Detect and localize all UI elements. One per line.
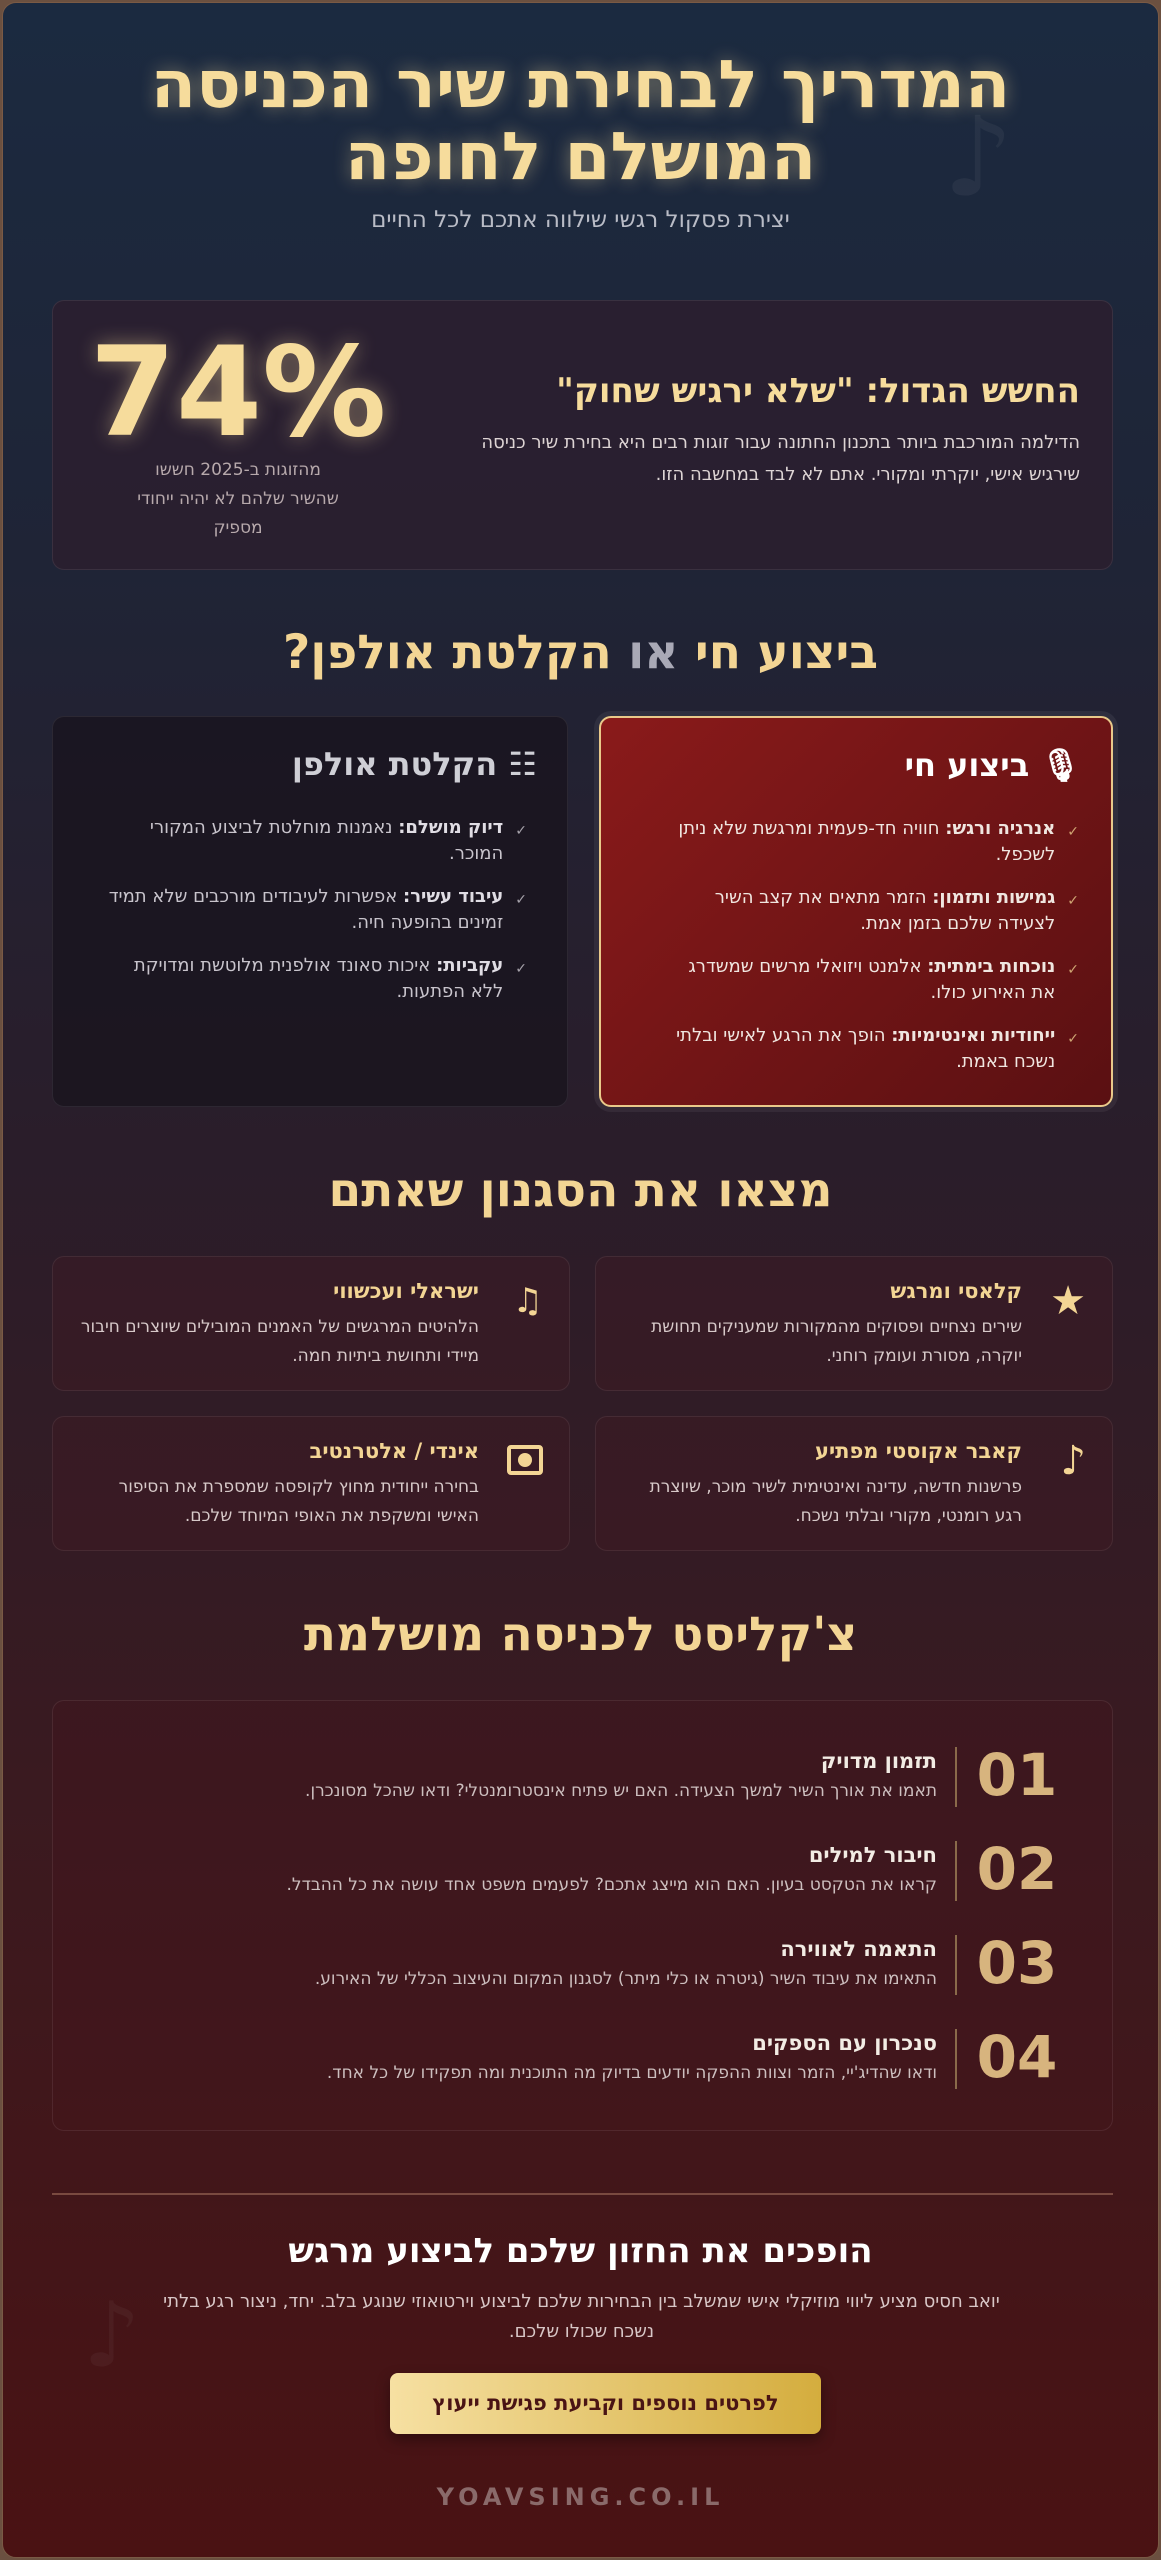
live list <box>676 818 1079 1072</box>
decorative note icon bottom: ♪ <box>83 2283 140 2388</box>
panel: checklist: 02 <box>977 1835 1057 1903</box>
panel: studio <box>52 716 568 1107</box>
title: המושלם לחופה <box>345 118 816 195</box>
live heading: 🎙 ביצוע חי <box>905 746 1081 784</box>
stat caption: מהזוגות ב-2025 חששו שהשיר שלהם לא יהיה ייחודי מספיק <box>137 460 339 538</box>
live list: אנרגיה ורגש: חוויה חד-פעמית ומרגשת שלא ניתן לשכפל. <box>678 818 1055 865</box>
card: acoustic: פרשנות חדשה, עדינה ואינטימית לשיר מוכר, שיוצרת רגע רומנטי, מקורי ובלתי נשכח. <box>650 1477 1022 1526</box>
title <box>148 46 1015 195</box>
studio list: עיבוד עשיר: אפשרות לעיבודים מורכבים שלא תמיד זמינים בהופעה חיה. <box>109 886 503 933</box>
CTA heading: הופכים את החזון שלכם לביצוע מרגש <box>288 2231 873 2271</box>
card: indie: אינדי / אלטרנטיב <box>310 1439 479 1463</box>
heading: styles: מצאו את הסגנון שאתם <box>329 1163 832 1218</box>
live list: גמישות ותזמון: הזמר מתאים את קצב השיר לצעידה שלכם בזמן אמת. <box>715 887 1055 934</box>
heading: checklist: צ'קליסט לכניסה מושלמת <box>304 1607 857 1662</box>
panel: checklist: תאמו את אורך השיר למשך הצעידה. האם יש פתיח אינסטרומנטלי? ודאו שהכל מסונכרן. <box>305 1781 937 1801</box>
panel: checklist: התאימו את עיבוד השיר (גיטרה או כלי מיתר) לסגנון המקום והעיצוב הכללי של האירוע. <box>315 1969 937 1989</box>
stat heading: החשש הגדול: "שלא ירגיש שחוק" <box>556 371 1080 411</box>
live list: ✓ <box>1067 893 1079 909</box>
studio list: ✓ <box>515 961 527 977</box>
icon: note: ♪ <box>1060 1438 1086 1484</box>
studio list <box>109 817 527 1002</box>
CTA button <box>390 2373 821 2434</box>
item 03 <box>315 1929 1057 1997</box>
panel: live <box>599 716 1113 1107</box>
card: acoustic <box>595 1416 1113 1551</box>
panel: checklist: התאמה לאווירה <box>780 1937 937 1961</box>
panel: checklist: 03 <box>977 1929 1057 1997</box>
studio list: ✓ <box>515 823 527 839</box>
heading: live vs studio: ביצוע חי או הקלטת אולפן? <box>283 625 878 680</box>
studio heading: ☷ הקלטת אולפן <box>292 745 537 783</box>
card: israeli: הלהיטים המרגשים של האמנים המובילים שיוצרים חיבור מיידי ותחושת ביתיות חמה. <box>81 1317 479 1366</box>
card: classic <box>595 1256 1113 1391</box>
item 02 <box>287 1835 1057 1903</box>
live list: ✓ <box>1067 824 1079 840</box>
panel: stat <box>52 300 1113 570</box>
item 01 <box>305 1741 1057 1809</box>
panel: checklist: חיבור למילים <box>809 1843 937 1867</box>
CTA text: יואב חסיס מציע ליווי מוזיקלי אישי שמשלב בין הבחירות שלכם לביצוע וירטואוזי שנוגע בלב. יחד, ניצור רגע בלתי נשכח שכולו שלכם. <box>163 2291 1000 2342</box>
card: israeli: ישראלי ועכשווי <box>333 1279 479 1303</box>
card: israeli <box>52 1256 570 1391</box>
studio list: עקביות: איכות סאונד אולפנית מלוטשת ומדויקת ללא הפתעות. <box>134 955 503 1002</box>
card: indie: בחירה ייחודית מחוץ לקופסה שמספרת את הסיפור האישי ומשקפת את האופי המיוחד שלכם. <box>119 1477 479 1526</box>
card: classic: שירים נצחיים ופסוקים מהמקורות שמעניקים תחושת יוקרה, מסורת ועומק רוחני. <box>651 1317 1022 1366</box>
title: המדריך לבחירת שיר הכניסה <box>151 46 1010 123</box>
icon: record <box>507 1445 543 1475</box>
panel: checklist: סנכרון עם הספקים <box>752 2031 937 2055</box>
panel: checklist: תזמון מדויק <box>821 1749 937 1773</box>
studio list: דיוק מושלם: נאמנות מוחלטת לביצוע המקורי המוכר. <box>150 817 503 864</box>
panel: checklist <box>52 1700 1113 2131</box>
live list: ✓ <box>1067 1031 1079 1047</box>
studio list: ✓ <box>515 892 527 908</box>
card: indie <box>52 1416 570 1551</box>
subtitle: יצירת פסקול רגשי שילווה אתכם לכל החיים <box>371 207 790 233</box>
stat number: 74% <box>90 321 386 465</box>
icon: dance: ♫ <box>513 1281 543 1321</box>
CTA button: לפרטים נוספים וקביעת פגישת ייעוץ <box>432 2391 779 2415</box>
decorative note icon top: ♪ <box>943 93 1013 221</box>
item 04 <box>327 2023 1057 2091</box>
panel: checklist: 01 <box>977 1741 1057 1809</box>
icon: star: ★ <box>1050 1278 1086 1324</box>
panel: checklist: ודאו שהדיג'יי, הזמר וצוות ההפקה יודעים בדיוק מה התוכנית ומה תפקידו של כל אחד. <box>327 2063 937 2083</box>
panel: checklist: 04 <box>977 2023 1057 2091</box>
stat text: הדילמה המורכבת ביותר בתכנון החתונה עבור זוגות רבים היא בחירת שיר כניסה שירגיש אישי, יוקרתי ומקורי. אתם לא לבד במחשבה הזו. <box>481 432 1080 485</box>
live list: נוכחות בימתית: אלמנט ויזואלי מרשים שמשדרג את האירוע כולו. <box>688 956 1055 1003</box>
panel: checklist: קראו את הטקסט בעיון. האם הוא מייצג אתכם? לפעמים משפט אחד עושה את כל ההבדל. <box>287 1875 937 1895</box>
card: acoustic: קאבר אקוסטי מפתיע <box>815 1439 1022 1463</box>
live list: ✓ <box>1067 962 1079 978</box>
live list: ייחודיות ואינטימיות: הופך את הרגע לאישי ובלתי נשכח באמת. <box>676 1025 1055 1072</box>
card: classic: קלאסי ומרגש <box>890 1279 1022 1303</box>
footer: YOAVSING.CO.IL <box>437 2483 724 2511</box>
